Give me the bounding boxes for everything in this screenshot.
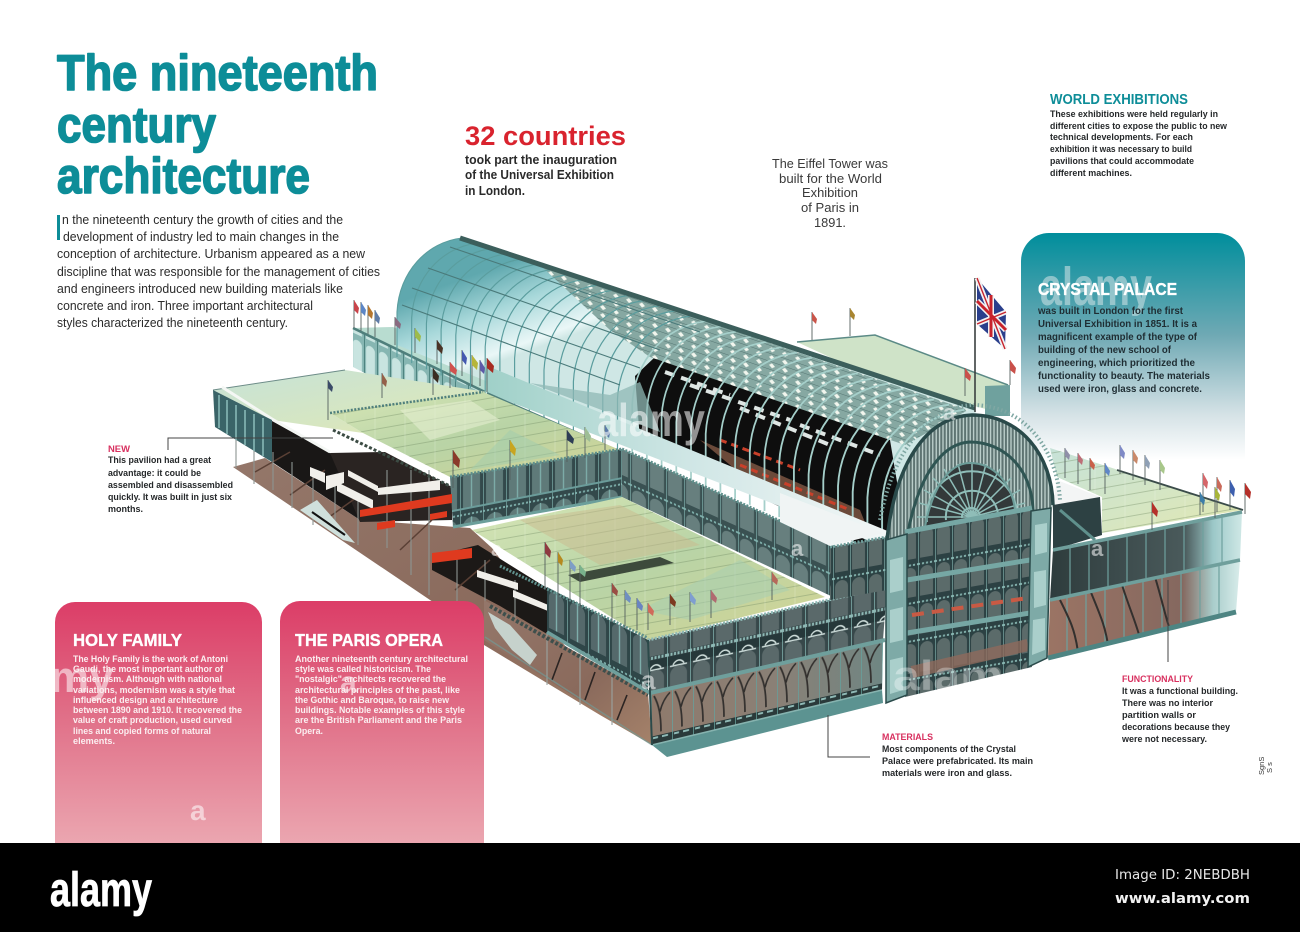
callout: Functionality: There was no interior [1122,698,1213,709]
text: Crystal Palace panel copy [1037,257,1210,395]
intro text block: development of industry led to main changes in the [63,229,339,244]
nave long facade [622,449,833,597]
panel: Holy Family: lines and copied forms of natural [73,726,211,737]
stock watermarks on the illustration: a [1091,536,1104,561]
text: Crystal Palace panel copy: used were iron, glass and concrete. [1038,384,1202,395]
text block: World Exhibitions: WORLD EXHIBITIONS [1050,92,1188,108]
glass barrel vault [397,238,1000,560]
flags on the back wing [328,300,494,420]
panel: Holy Family: Gaudi, the most important author of [73,664,224,675]
lattice roof strip [540,265,968,445]
callout: 32 countries: took part the inauguration [465,153,617,167]
right wing facade [1048,512,1242,658]
stock watermarks on the illustration: a [491,539,503,561]
panel: The Paris Opera: a [340,666,357,699]
panel: Holy Family: value of craft production, used curved [73,715,232,726]
text block: Eiffel Tower: Exhibition [802,185,858,200]
title: The nineteenth [57,45,378,101]
text block: World Exhibitions: These exhibitions were held regularly in [1050,109,1218,120]
panel: The Paris Opera: are the British Parliament and the Paris [295,715,462,726]
callout: New [108,438,333,515]
callout: Materials [828,715,1033,779]
text block: World Exhibitions: technical developments. For each [1050,132,1193,143]
text block: World Exhibitions: pavilions that could accommodate [1050,156,1194,167]
callout: New: quickly. It was built in just six [108,492,233,503]
panel: Crystal Palace [1021,233,1245,460]
text: Crystal Palace panel copy: CRYSTAL PALACE [1038,279,1177,299]
panel: Holy Family: a [190,795,206,826]
callout: Materials: MATERIALS [882,731,933,742]
text block: Eiffel Tower: 1891. [814,215,846,230]
panel: Holy Family: variations, modernism was a style that [73,685,236,696]
intro text block: and engineers introduced new building materials like [57,281,343,296]
text block: Eiffel Tower: The Eiffel Tower was [772,156,888,171]
ground slab and lower structure [233,421,652,745]
icon: Union Jack flag [975,278,1006,412]
callout: 32 countries: of the Universal Exhibition [465,168,614,182]
nave parapet band [485,365,890,546]
callout: New: This pavilion had a great [108,455,212,466]
panel: The Paris Opera [280,601,484,843]
image id: Image ID: 2NEBDBH [1115,867,1250,883]
rotated imprint mark: SgnS [1257,757,1266,775]
facade: upper courtyard [450,449,622,527]
transept piers [886,508,1051,703]
text: Crystal Palace panel copy: magnificent example of the type of [1038,332,1197,343]
logo: alamy: alamy [50,864,152,917]
panel: Holy Family: between 1890 and 1910. It recovered the [73,705,242,716]
text: Crystal Palace panel copy: building of the new school of [1038,345,1171,356]
intro text block: conception of architecture. Urbanism appeared as a new [57,246,365,261]
callout: Materials: materials were iron and glass. [882,768,1012,779]
text block: World Exhibitions: different machines. [1050,168,1132,179]
roof: far-left wing [213,370,487,462]
callout: New: assembled and disassembled [108,480,233,491]
stock watermarks on the illustration: a [791,536,804,561]
text: Crystal Palace panel copy: functionality to beauty. The materials [1038,371,1210,382]
text block: World Exhibitions [1050,92,1227,179]
callout: 32 countries: in London. [465,184,525,198]
panel: The Paris Opera: Another nineteenth century architectural [295,654,468,665]
callout: Functionality: decorations because they [1122,722,1231,733]
back wing, right [797,335,1010,416]
callout: Materials: Most components of the Crystal [882,744,1016,755]
intro text block: n the nineteenth century the growth of cities and the [62,212,343,227]
panel: Holy Family: HOLY FAMILY [73,630,182,650]
callout: Materials: Palace were prefabricated. Its main [882,756,1033,767]
facade: main front, two floors on a plinth [648,493,887,757]
black bays with white galleries and red bars [300,467,553,613]
panel: Holy Family: my [50,653,114,702]
text: Crystal Palace panel copy: Universal Exhibition in 1851. It is a [1038,319,1197,330]
intro text block: styles characterized the nineteenth century. [57,315,288,330]
dark cut-away interior [635,357,905,545]
panel: The Paris Opera: Opera. [295,726,323,737]
intro text block: discipline that was responsible for the management of cities [57,264,380,279]
panel: The Paris Opera: THE PARIS OPERA [295,630,443,650]
callout: New: advantage: it could be [108,468,201,479]
right wing roof [1050,448,1243,550]
text block: World Exhibitions: different cities to expose the public to new [1050,121,1227,132]
roof: green glass, lower [472,497,825,640]
intro text block: concrete and iron. Three important architectural [57,298,313,313]
roof: green glass, upper [330,392,620,487]
callout: Functionality: were not necessary. [1121,734,1207,745]
transept front with great arch [880,405,1060,703]
title: architecture [57,148,310,204]
panel: Holy Family: The Holy Family is the work of Antoni [73,654,228,665]
title: century [57,97,216,153]
flags on the right side [812,308,1251,530]
panel: The Paris Opera: buildings. Notable examples of this style [295,705,465,716]
back wing, left [353,327,487,412]
panel: The Paris Opera: architectural principles of the past, like [295,685,460,696]
callout: Functionality: FUNCTIONALITY [1122,673,1194,684]
panel: The Paris Opera: style was called historicism. The [295,664,431,675]
panel: The Paris Opera: "nostalgic" architects recovered the [295,674,446,685]
callout: Functionality: partition walls or [1122,710,1196,721]
stock watermarks on the illustration [491,394,1104,699]
panel: Holy Family: elements. [73,736,115,747]
illustration: Crystal Palace cutaway [213,238,1251,757]
rotated imprint mark [1257,757,1274,775]
panel: Holy Family: modernism. Although with national [73,674,222,685]
callout: New: months. [108,504,143,515]
stock watermarks on the illustration: alam [893,652,1003,699]
callout: 32 countries: 32 countries [465,121,626,151]
text block: World Exhibitions: exhibition it was necessary to build [1050,144,1192,155]
footer bar [0,843,1300,932]
flags on the lower roof [545,542,778,630]
flags on the upper roof [453,425,610,488]
text block: Eiffel Tower [772,156,888,230]
panel: Holy Family [50,602,262,843]
stock watermarks on the illustration: a [641,665,656,695]
text block: Eiffel Tower: built for the World [779,171,882,186]
panel: The Paris Opera: the Gothic and Baroque, to raise new [295,695,449,706]
facade: south-west side, upper floor and open ground floor [484,566,652,745]
callout: New: NEW [108,443,130,454]
title [57,45,378,204]
intro text block [57,212,380,330]
panel: Holy Family: influenced design and architecture [73,695,218,706]
stock watermarks on the illustration: a [943,400,956,425]
callout: Functionality [1121,580,1238,745]
callout: Functionality: It was a functional building. [1122,686,1238,697]
text: Crystal Palace panel copy: was built in London for the first [1037,306,1183,317]
stock watermarks on the illustration: alamy [597,394,705,446]
text block: Eiffel Tower: of Paris in [801,200,859,215]
vault ribs [397,238,690,449]
rotated imprint mark: S s [1265,762,1274,773]
text: Crystal Palace panel copy: engineering, which prioritized the [1038,358,1195,369]
text: Crystal Palace panel copy: alamy [1040,257,1152,317]
callout: 32 countries [465,121,626,198]
website: www.alamy.com [1115,891,1250,907]
